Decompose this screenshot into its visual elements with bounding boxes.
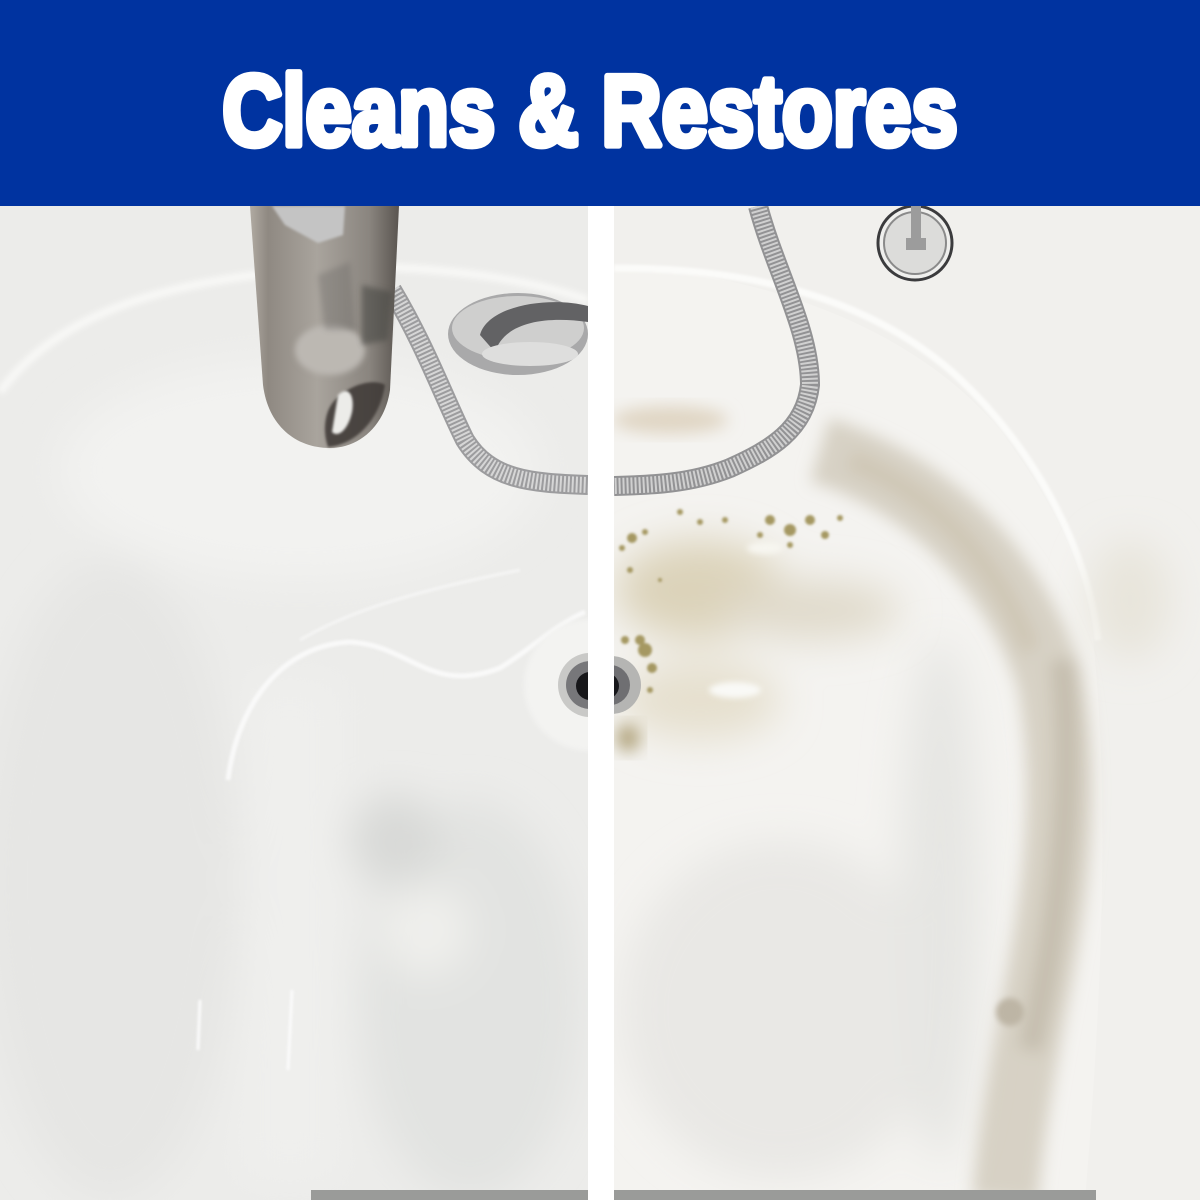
- stain: rust near drain: [615, 540, 900, 740]
- water highlights: [198, 570, 585, 1070]
- icon: shower hose: [392, 290, 588, 485]
- basin: [614, 268, 1102, 1200]
- icon: overflow cover: [448, 293, 588, 375]
- icon: drain left half: [558, 653, 588, 717]
- stain: drip inside band: [996, 998, 1024, 1026]
- stain: upper-left scum: [612, 406, 728, 434]
- icon: drain right half: [583, 656, 641, 714]
- photo: stained bathtub (before): [583, 206, 1200, 1200]
- bottom grey strips: [311, 1190, 588, 1200]
- icon: overflow ring: [878, 206, 952, 280]
- icon: chrome faucet spout: [250, 206, 399, 448]
- divider: [588, 206, 614, 1200]
- title: Cleans & Restores: [222, 53, 958, 167]
- icon: shower hose: [614, 206, 810, 486]
- stain: speckles: [619, 509, 843, 693]
- highlight patches: [709, 682, 761, 698]
- header banner: [0, 0, 1200, 206]
- basin shading: [352, 795, 562, 1179]
- stain: band around tub: [820, 450, 1067, 1200]
- rim highlight: [0, 267, 588, 392]
- photo: clean bathtub (after): [0, 206, 588, 1200]
- basin shading: [620, 540, 1170, 1180]
